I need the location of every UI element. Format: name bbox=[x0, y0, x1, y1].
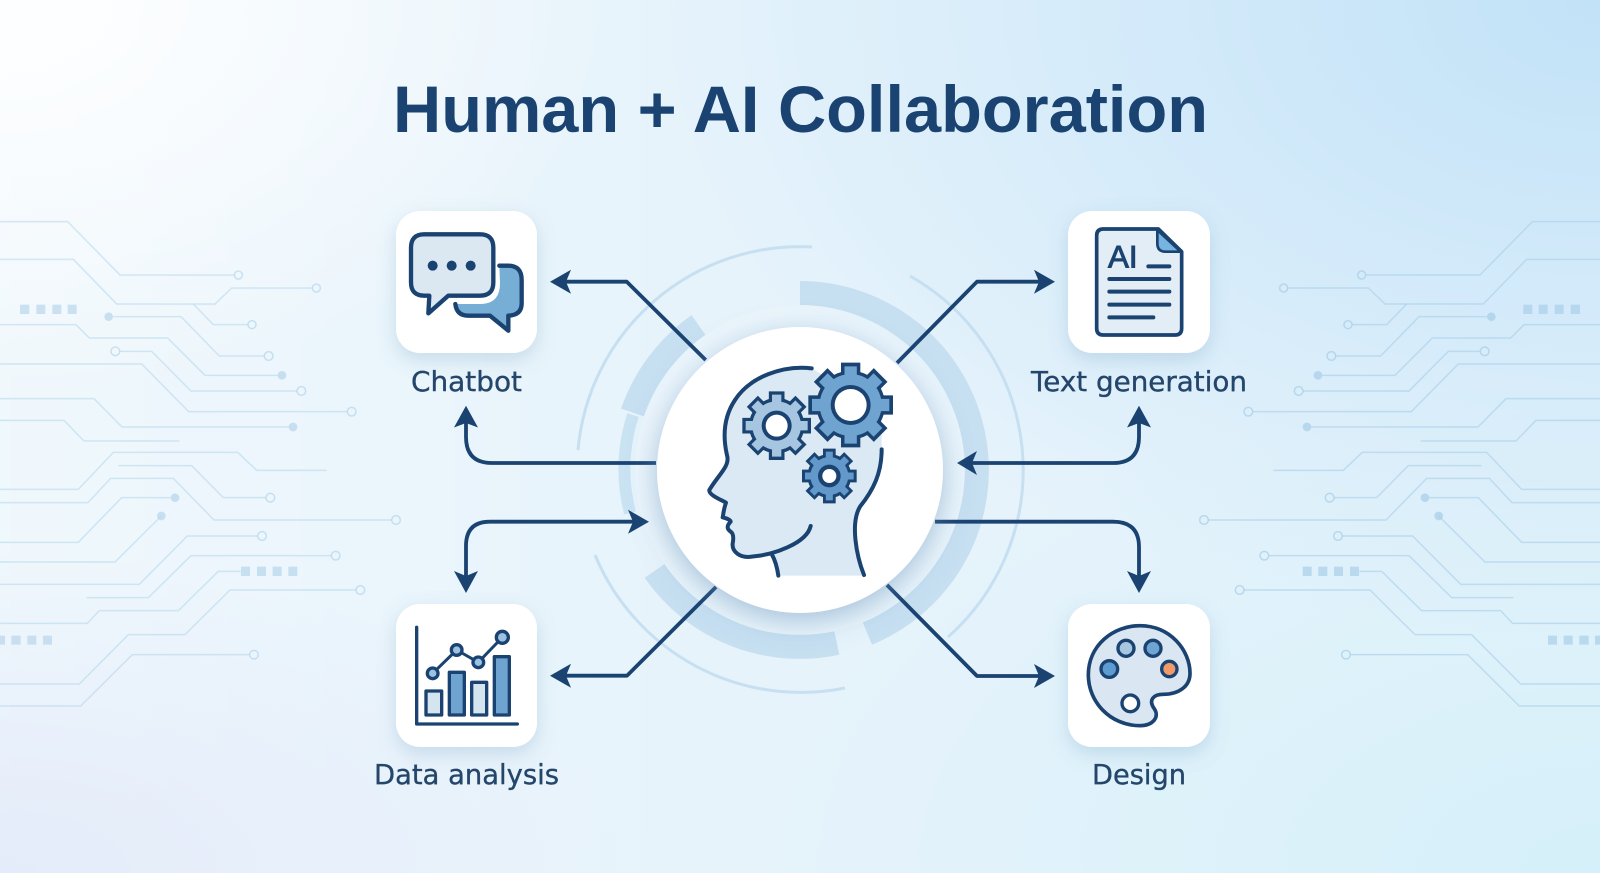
icon: AI document bbox=[1097, 229, 1182, 335]
head silhouette fill bbox=[709, 368, 882, 576]
label: text generation: Text generation bbox=[1030, 365, 1247, 398]
arrow: centre to text generation (diagonal) bbox=[897, 270, 1055, 363]
arrow: centre to design (diagonal) bbox=[887, 585, 1055, 688]
circuit pattern: left bbox=[0, 222, 400, 706]
icon: AI document: AI bbox=[1108, 240, 1138, 275]
label: chatbot: Chatbot bbox=[411, 365, 522, 398]
arrow: centre to data analysis (diagonal) bbox=[550, 587, 716, 688]
title: Human + AI Collaboration bbox=[393, 72, 1208, 146]
circuit pattern: right bbox=[1200, 222, 1600, 706]
centre circle bbox=[657, 327, 943, 613]
label: design: Design bbox=[1092, 758, 1186, 791]
gear: large bbox=[808, 363, 893, 447]
card: design bbox=[1068, 604, 1210, 747]
gear: small bbox=[802, 449, 857, 503]
icon: head with gears bbox=[709, 363, 893, 576]
gear: medium bbox=[742, 391, 811, 460]
arrow: data analysis and centre (two-way) bbox=[454, 510, 649, 593]
arrow: text generation and centre (two-way) bbox=[957, 406, 1151, 475]
icon: bar and line chart bbox=[417, 627, 517, 724]
concentric rings around centre bbox=[578, 247, 1023, 692]
head outline bbox=[709, 368, 882, 576]
label: data analysis: Data analysis bbox=[374, 758, 559, 791]
arrow: centre to chatbot (diagonal) bbox=[550, 270, 706, 360]
arrow: centre to chatbot (curved) bbox=[454, 406, 656, 463]
card: chatbot bbox=[396, 211, 537, 353]
icon: chat bubbles bbox=[411, 234, 522, 331]
card: data analysis bbox=[396, 604, 537, 747]
card: text generation bbox=[1068, 211, 1210, 353]
arrow: centre to design (curved) bbox=[935, 522, 1151, 593]
icon: palette bbox=[1088, 626, 1190, 726]
